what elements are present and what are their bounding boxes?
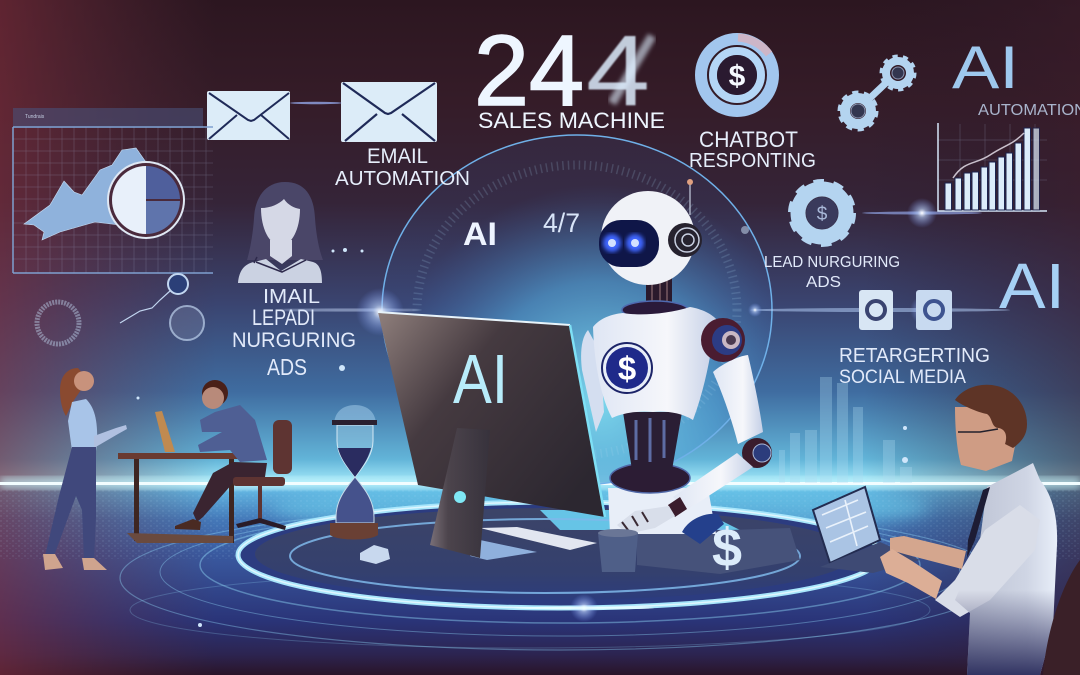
icon: center envelope xyxy=(341,82,437,142)
small glowing orbs xyxy=(37,274,204,344)
headline: 24/4 sales machine: SALES MACHINE xyxy=(478,108,665,133)
panel title bar: Tundrais xyxy=(25,114,45,120)
headline: 24/4 sales machine: 24 xyxy=(474,15,584,127)
keyboard xyxy=(480,527,597,550)
hologram labels: AI xyxy=(463,216,497,252)
hologram labels xyxy=(463,208,580,252)
man head xyxy=(202,380,228,409)
man shoe xyxy=(175,519,201,530)
hologram sphere xyxy=(382,135,772,485)
robot left arm xyxy=(581,330,604,432)
icon: gear center right xyxy=(792,183,852,243)
hourglass xyxy=(330,405,378,540)
desk surface xyxy=(238,502,882,622)
robot shoulder xyxy=(701,318,745,362)
headline: 24/4 sales machine: 4 xyxy=(586,15,650,127)
shirt shadow xyxy=(955,463,1057,675)
icon: linked gears xyxy=(840,57,914,129)
retargeting label xyxy=(839,345,990,388)
hologram labels: 4/7 xyxy=(543,208,580,238)
robot xyxy=(581,179,772,544)
left ads label: ADS xyxy=(267,354,307,380)
light flares xyxy=(280,102,1010,336)
mountain chart xyxy=(24,148,148,240)
monitor stand xyxy=(470,540,537,560)
forearm back xyxy=(890,536,966,569)
corner chair dark xyxy=(1043,560,1080,675)
broken glasses paper xyxy=(360,545,390,564)
retargeting icons xyxy=(859,290,952,330)
AI automation heading xyxy=(952,34,1080,119)
headline: 24/4 sales machine xyxy=(474,15,665,133)
chatbot label: RESPONTING xyxy=(689,150,816,172)
man head xyxy=(955,385,1027,471)
panel title bar xyxy=(13,108,203,128)
email automation label: AUTOMATION xyxy=(335,168,470,190)
icon: clock pie xyxy=(107,161,185,239)
robot head xyxy=(599,179,702,285)
left ads label: NURGURING xyxy=(232,329,356,352)
chatbot label xyxy=(689,127,816,172)
icon: left envelope xyxy=(207,91,290,140)
people: man with laptop xyxy=(880,385,1057,675)
cup xyxy=(598,529,638,572)
man trousers xyxy=(193,462,267,522)
retargeting label: SOCIAL MEDIA xyxy=(839,367,966,388)
sparkles xyxy=(136,226,908,627)
robot hand xyxy=(617,497,687,534)
robot elbow xyxy=(742,438,772,468)
AI automation heading: AI xyxy=(952,34,1019,101)
people: man at desk xyxy=(118,380,292,543)
man shirt xyxy=(955,463,1057,675)
background bars right xyxy=(779,377,912,483)
robot forearm xyxy=(673,453,753,510)
man shirt xyxy=(198,405,267,462)
retargeting label: RETARGERTING xyxy=(839,345,990,367)
desk xyxy=(118,453,240,543)
large AI right: AI xyxy=(999,250,1065,322)
icon: woman avatar xyxy=(238,182,323,283)
robot badge: $ xyxy=(618,350,636,387)
people: standing woman xyxy=(43,368,127,570)
monitor xyxy=(378,312,605,517)
lead nurturing label xyxy=(764,254,900,291)
robot upper arm xyxy=(713,355,763,444)
left ads label: IMAIL xyxy=(263,286,320,308)
dollar symbol: $ xyxy=(712,518,742,578)
lead nurturing label: LEAD NURGURING xyxy=(764,254,900,271)
laptop xyxy=(155,411,175,452)
chatbot label: CHATBOT xyxy=(699,127,798,152)
lead nurturing label: ADS xyxy=(806,274,841,291)
robot lower body xyxy=(608,463,724,544)
robot badge xyxy=(602,343,652,393)
robot abdomen mechanism xyxy=(623,412,682,470)
laptop right xyxy=(813,487,920,573)
email automation label xyxy=(335,145,470,190)
icon: gear center right: $ xyxy=(817,204,828,225)
left ads label: LEPADI xyxy=(252,305,315,330)
sleeve xyxy=(935,505,1040,617)
monitor stem xyxy=(430,428,490,558)
monitor: AI xyxy=(453,340,508,418)
email automation label: EMAIL xyxy=(367,145,428,168)
floor rings xyxy=(120,506,1000,650)
chart panel: left pie and grid xyxy=(13,108,213,273)
forearm front xyxy=(880,549,942,599)
icon: chatbot target dollar: $ xyxy=(729,60,746,93)
bar chart xyxy=(938,123,1047,212)
tie xyxy=(967,487,990,558)
icon: chatbot target dollar xyxy=(701,38,773,111)
robot neck xyxy=(622,272,688,319)
robot torso xyxy=(593,307,717,420)
chair xyxy=(233,420,292,530)
left ads label xyxy=(232,286,356,380)
